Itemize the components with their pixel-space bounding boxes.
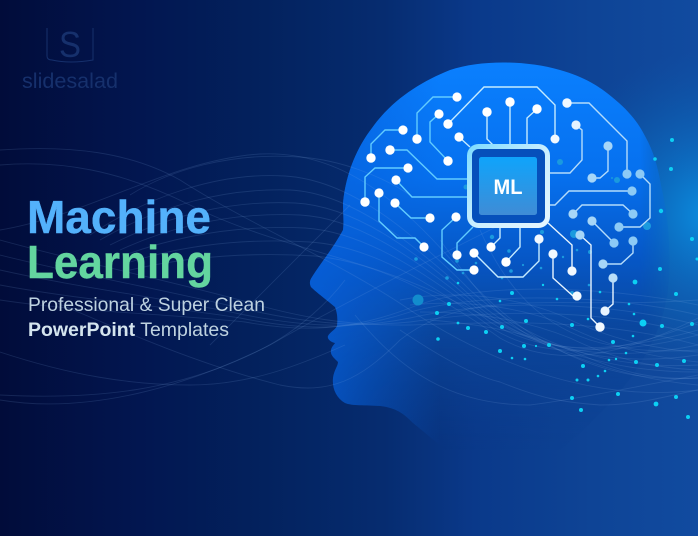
circuit brain [360, 87, 650, 332]
subtitle: PowerPoint Templates [28, 319, 229, 341]
subtitle: Professional & Super Clean [28, 294, 265, 316]
light blue circuit nodes [568, 141, 645, 283]
right circuit traces [548, 103, 650, 264]
logo: slidesalad: slidesalad [22, 70, 118, 93]
white circuit nodes [360, 92, 610, 332]
top circuit traces [448, 87, 555, 277]
left circuit traces [365, 97, 474, 270]
ML processor chip [470, 146, 548, 226]
title [27, 191, 213, 288]
logo: slidesalad [22, 24, 118, 93]
subtitle [28, 294, 265, 341]
ML processor chip: ML [494, 176, 523, 199]
logo: slidesalad: S [59, 24, 81, 65]
flowing wave lines [0, 149, 698, 405]
head silhouette [310, 62, 670, 470]
lower right circuit traces [548, 223, 613, 327]
title: Machine [27, 191, 211, 243]
title: Learning [27, 236, 213, 288]
data particles [412, 138, 698, 419]
